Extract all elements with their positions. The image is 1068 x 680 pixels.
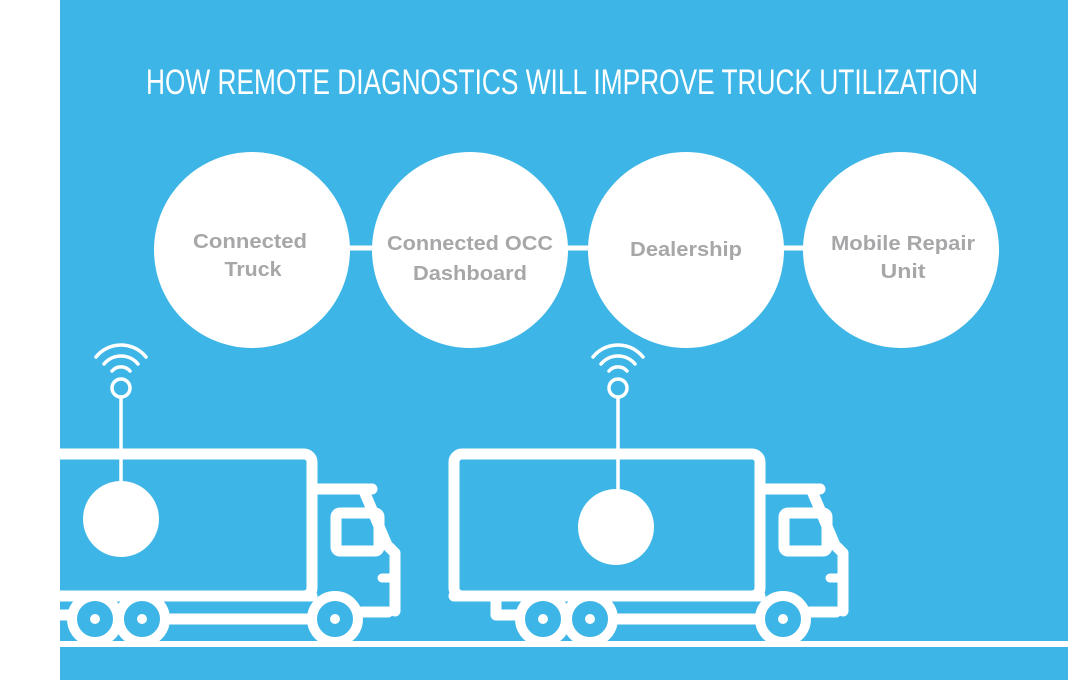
ground line	[60, 641, 1068, 647]
truck 1	[6, 345, 395, 642]
sensor antenna 1	[83, 345, 159, 557]
truck 2	[454, 345, 843, 642]
step: Dealership	[588, 152, 784, 348]
left white margin	[0, 0, 60, 680]
step: Connected OCC Dashboard: Connected OCC	[387, 233, 553, 255]
step: Connected Truck: Connected	[193, 231, 307, 253]
step: Mobile Repair Unit: Unit	[880, 261, 926, 283]
step: Connected OCC Dashboard: Dashboard	[413, 263, 527, 285]
step: Connected OCC Dashboard	[372, 152, 568, 348]
sensor antenna 2	[578, 345, 654, 565]
step: Connected Truck	[154, 152, 350, 348]
step: Mobile Repair Unit	[803, 152, 999, 348]
step: Mobile Repair Unit: Mobile Repair	[831, 233, 975, 255]
process flow	[154, 152, 999, 348]
step: Dealership: Dealership	[630, 239, 742, 261]
step: Connected Truck: Truck	[224, 259, 282, 281]
